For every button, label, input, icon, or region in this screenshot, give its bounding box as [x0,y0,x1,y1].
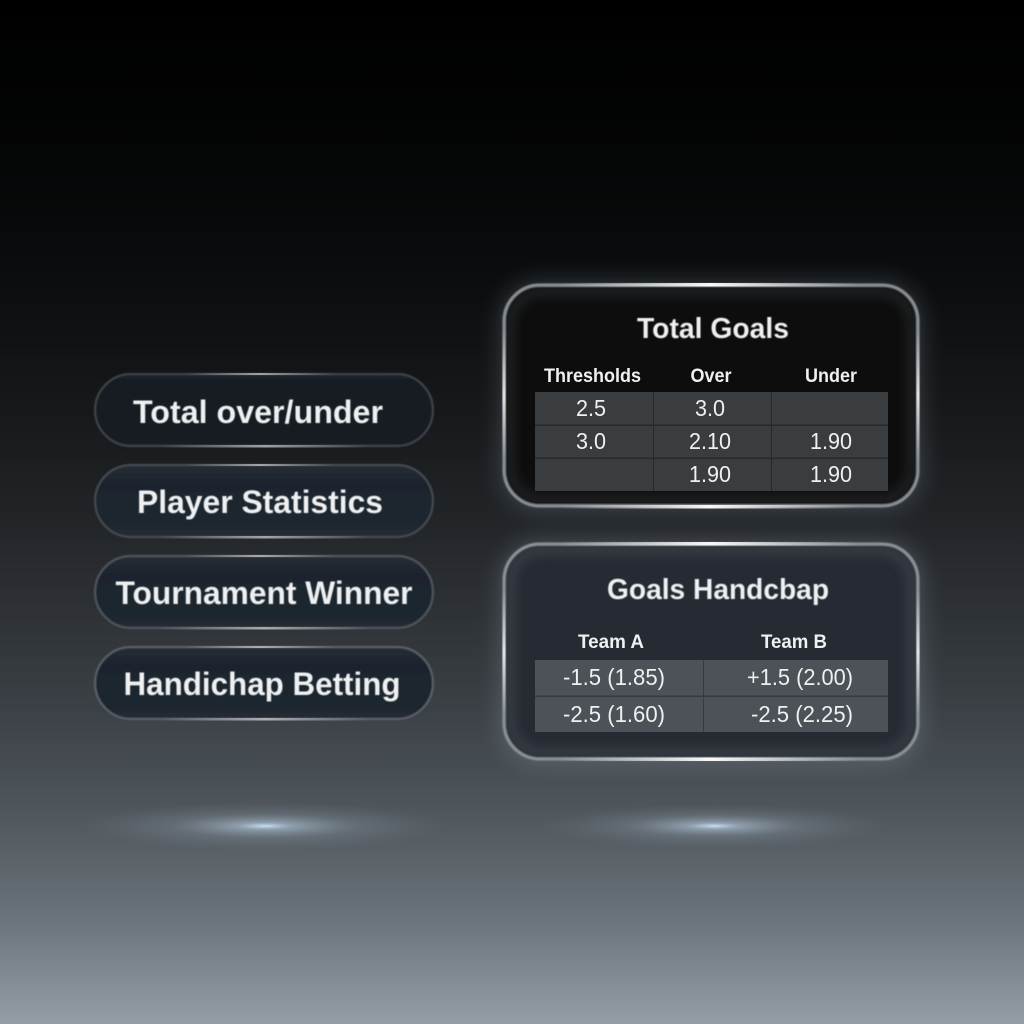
column headers [578,631,827,653]
table: goals handicap [535,631,888,732]
table values: -1.5 (1.85) [563,664,665,690]
heading: total goals: Total Goals [637,313,789,345]
table values: 2.10 [689,428,731,454]
table values: 1.90 [810,428,852,454]
panel: total goals [502,283,920,508]
heading: goals handcbap: Goals Handcbap [607,574,829,606]
pill: handichap betting: Handichap Betting [124,666,400,702]
floor glow right [539,804,889,848]
table values: +1.5 (2.00) [747,664,853,690]
pill: handichap betting [95,646,433,720]
pill: player statistics [95,464,433,538]
table values [576,395,852,487]
pill: total over/under [95,373,433,448]
table values: 3.0 [695,395,725,421]
table values: 3.0 [576,428,606,454]
table cells [535,392,888,491]
column headers: Over [690,365,732,387]
menu pills [95,373,433,720]
column headers: Team B [761,631,827,653]
floor glow left [80,802,450,850]
table values [563,664,853,727]
panel: goals handicap [502,542,920,761]
table: total goals [535,365,888,491]
table values: 2.5 [576,395,606,421]
pill: total over/under: Total over/under [133,394,383,430]
table values: -2.5 (1.60) [563,701,665,727]
column headers [544,365,857,387]
column headers: Team A [578,631,644,653]
column headers: Thresholds [544,365,641,387]
pill: player statistics: Player Statistics [137,484,383,520]
table values: 1.90 [810,461,852,487]
table cells [535,660,888,732]
column headers: Under [805,365,857,387]
table values: -2.5 (2.25) [751,701,853,727]
pill: tournament winner [95,555,433,630]
pill: tournament winner: Tournament Winner [116,575,412,611]
table values: 1.90 [689,461,731,487]
